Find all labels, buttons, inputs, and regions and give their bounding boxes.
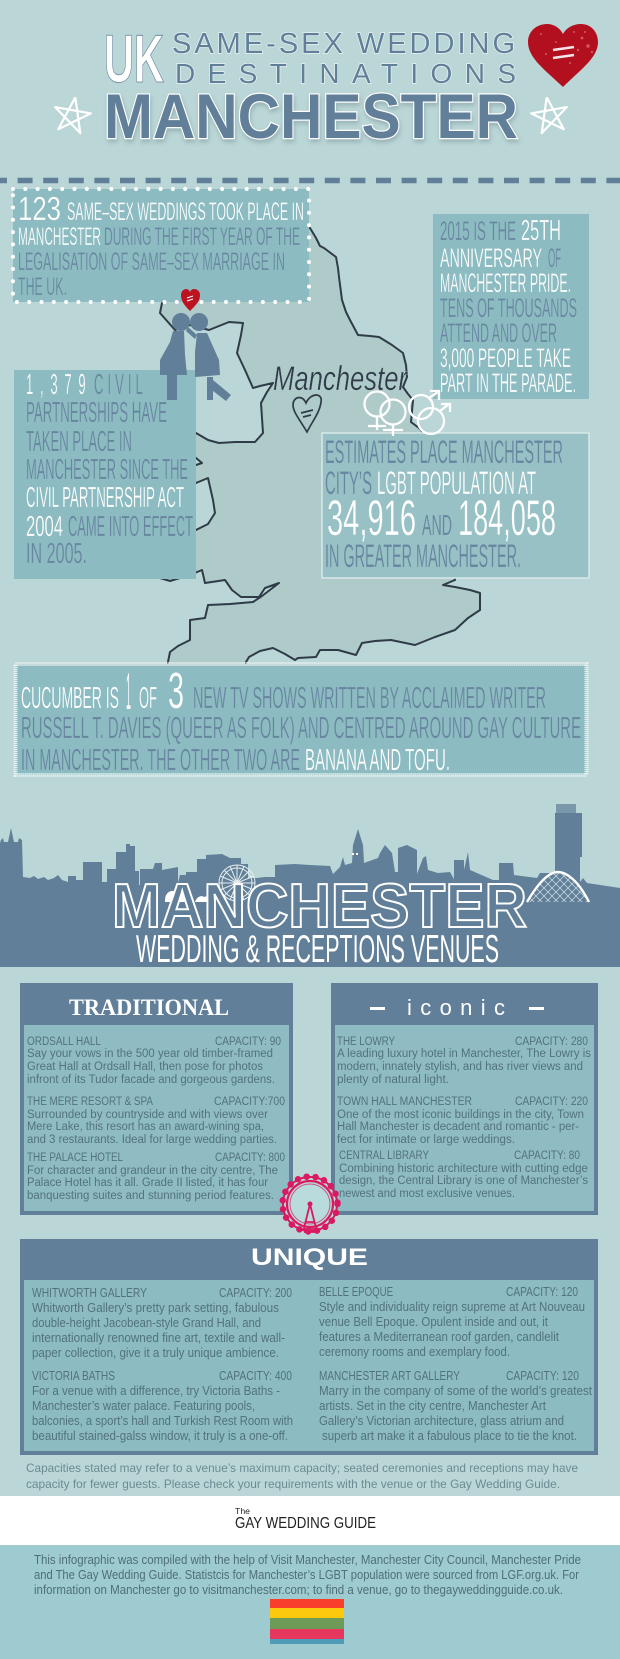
- venue: Town Hall Manchester: One of the most iconic buildings in the city, Town: [337, 1109, 584, 1121]
- venue: Victoria Baths: Manchester’s water palace. Featuring pools,: [32, 1399, 255, 1413]
- title: same-sex wedding: SAME-SEX WEDDING: [172, 28, 515, 60]
- venue: The Mere Resort: THE MERE RESORT & SPA: [27, 1096, 153, 1108]
- venue: Manchester Art Gallery: artists. Set in the city centre, Manchester Art: [319, 1399, 546, 1413]
- panel: LGBT population: CITY’S: [325, 465, 372, 501]
- panel: 123 weddings: MANCHESTER: [18, 223, 101, 251]
- venue: The Lowry: CAPACITY: 280: [515, 1036, 588, 1048]
- panel: civil partnerships: CIVIL: [94, 368, 147, 400]
- venue: The Palace Hotel: [27, 1152, 285, 1202]
- venue: Central Library: CENTRAL LIBRARY: [339, 1150, 429, 1162]
- panel: civil partnerships: IN 2005.: [26, 538, 87, 570]
- venue: Manchester Art Gallery: [319, 1369, 592, 1443]
- venue: Belle Epoque: Style and individuality reign supreme at Art Nouveau: [319, 1300, 585, 1314]
- icon: gender symbols: [364, 391, 450, 436]
- venue: The Palace Hotel: banquesting suites and stunning period features.: [27, 1190, 274, 1202]
- title: destinations: DESTINATIONS: [175, 58, 516, 89]
- venue: Town Hall Manchester: CAPACITY: 220: [515, 1096, 588, 1108]
- panel: 123 weddings: THE UK.: [18, 273, 67, 301]
- icon: Lowry dome: [527, 872, 589, 902]
- venue: The Palace Hotel: CAPACITY: 800: [215, 1152, 285, 1164]
- heading: Manchester outline: MANCHESTER: [112, 872, 527, 941]
- heading: iconic: iconic: [407, 995, 505, 1020]
- white clouds behind the heading: [165, 890, 213, 902]
- panel: Manchester Pride: 25TH: [521, 215, 561, 247]
- venue: Victoria Baths: For a venue with a difference, try Victoria Baths -: [32, 1384, 280, 1398]
- heading: unique: UNIQUE: [251, 1244, 368, 1271]
- panel: Cucumber TV show: BANANA AND TOFU.: [305, 742, 450, 777]
- venue: Central Library: design, the Central Library is one of Manchester’s: [339, 1175, 588, 1187]
- panel: Cucumber TV show: CUCUMBER IS: [21, 680, 119, 715]
- venue: Belle Epoque: features a Mediterranean roof garden, candlelit: [319, 1330, 559, 1344]
- title: Manchester: MANCHESTER: [104, 82, 518, 152]
- venue: Whitworth Gallery: internationally renowned fine art, textile and wall-: [32, 1331, 285, 1345]
- capacity disclaimer: capacity for fewer guests. Please check your requirements with the venue or the Gay Wedding Guide.: [26, 1477, 560, 1491]
- venue: The Lowry: A leading luxury hotel in Manchester, The Lowry is: [337, 1048, 591, 1060]
- venue: Manchester Art Gallery: CAPACITY: 120: [506, 1369, 579, 1383]
- venue: Central Library: [339, 1150, 588, 1200]
- panel: civil partnerships: TAKEN PLACE IN: [26, 426, 132, 458]
- icon: red heart: [528, 24, 598, 87]
- icon: pink wheel badge: [282, 1176, 338, 1232]
- icon: small heart: [181, 289, 200, 311]
- logo band: The Gay Wedding Guide: The: [235, 1507, 251, 1516]
- panel: Cucumber TV show: [16, 662, 586, 777]
- icon: kissing couple: [160, 313, 231, 401]
- panel: Cucumber TV show: IN MANCHESTER. THE OTHER TWO ARE: [21, 742, 300, 777]
- text: CAME INTO EFFECT: [68, 511, 193, 543]
- footer credits: This infographic was compiled with the help of Visit Manchester, Manchester City Council, Manchester Pride: [34, 1553, 581, 1567]
- skyline silhouette: [0, 813, 620, 967]
- venue: The Lowry: [337, 1036, 591, 1086]
- venue: The Palace Hotel: Palace Hotel has it all. Grade II listed, it has four: [27, 1177, 268, 1189]
- footer credits: information on Manchester go to visitmanchester.com; to find a venue, go to thegayweddingguide.co.uk.: [34, 1583, 563, 1597]
- panel: Cucumber TV show: 1: [126, 663, 131, 721]
- venue: The Mere Resort: Surrounded by countryside and with views over: [27, 1109, 268, 1121]
- panel: 123 weddings: 123: [18, 190, 61, 227]
- panel: LGBT population: 34,916: [327, 490, 416, 546]
- Beetham Tower crown: [556, 804, 576, 813]
- venue: Victoria Baths: beautiful stained-galss window, it truly is a one-off.: [32, 1429, 288, 1443]
- icon: left star: [55, 97, 91, 133]
- venue: Victoria Baths: CAPACITY: 400: [219, 1369, 292, 1383]
- venue: Whitworth Gallery: CAPACITY: 200: [219, 1286, 292, 1300]
- venue: Whitworth Gallery: WHITWORTH GALLERY: [32, 1286, 148, 1300]
- panel: Manchester Pride: OF: [548, 243, 561, 273]
- venue: The Lowry: THE LOWRY: [337, 1036, 395, 1048]
- footer panel: [0, 1545, 620, 1659]
- venue: Belle Epoque: [319, 1285, 585, 1359]
- venue: The Palace Hotel: THE PALACE HOTEL: [27, 1152, 124, 1164]
- venue: Ordsall Hall: CAPACITY: 90: [215, 1036, 281, 1048]
- panel: Cucumber TV show: 3: [168, 662, 184, 719]
- venue: The Lowry: plenty of natural light.: [337, 1074, 449, 1086]
- venue: The Palace Hotel: For character and grandeur in the city centre, The: [27, 1165, 278, 1177]
- venue: Victoria Baths: balconies, a sport’s hall and Turkish Rest Room with: [32, 1414, 293, 1428]
- capacity disclaimer: [26, 1461, 578, 1491]
- icon: rainbow flag: [270, 1599, 344, 1644]
- venue: The Lowry: modern, innately stylish, and has river views and: [337, 1061, 583, 1073]
- panel: 123 weddings: SAME–SEX WEDDINGS TOOK PLACE IN: [67, 198, 304, 226]
- panel: 123 weddings: [13, 189, 309, 302]
- panel: 123 weddings: LEGALISATION OF SAME–SEX MARRIAGE IN: [18, 248, 285, 276]
- venue: Belle Epoque: ceremony rooms and exemplary food.: [319, 1345, 510, 1359]
- venue: Manchester Art Gallery: Gallery’s Victorian architecture, glass atrium and: [319, 1414, 564, 1428]
- venue: Ordsall Hall: infront of its Tudor facade and gorgeous gardens.: [27, 1074, 275, 1086]
- venue: Whitworth Gallery: paper collection, give it a truly unique ambience.: [32, 1346, 279, 1360]
- label: Manchester handwriting: Manchester: [273, 360, 408, 398]
- venue: Victoria Baths: VICTORIA BATHS: [32, 1369, 115, 1383]
- venue: The Mere Resort: [27, 1096, 285, 1146]
- venue: Whitworth Gallery: Whitworth Gallery’s pretty park setting, fabulous: [32, 1301, 279, 1315]
- icon: right star: [531, 97, 567, 133]
- venue: Town Hall Manchester: fect for intimate or large weddings.: [337, 1134, 515, 1146]
- title: UK: UK: [104, 21, 164, 97]
- venue: Town Hall Manchester: Hall Manchester is decadent and romantic - per-: [337, 1121, 579, 1133]
- venue: Ordsall Hall: [27, 1036, 281, 1086]
- icon: ferris wheel: [219, 865, 255, 901]
- logo band: The Gay Wedding Guide: [0, 1496, 620, 1545]
- venue: Manchester Art Gallery: MANCHESTER ART GALLERY: [319, 1369, 461, 1383]
- panel: iconic venues: [331, 983, 598, 1215]
- panel: civil partnerships: [14, 368, 196, 579]
- venue: Belle Epoque: venue Bell Epoque. Opulent inside and out, it: [319, 1315, 548, 1329]
- venue: Town Hall Manchester: TOWN HALL MANCHESTER: [337, 1096, 472, 1108]
- venue: Manchester Art Gallery: Marry in the company of some of the world’s greatest: [319, 1384, 592, 1398]
- panel: LGBT population: [322, 433, 589, 578]
- venue: The Mere Resort: Mere Lake, this resort has an award-wining spa,: [27, 1121, 264, 1133]
- heading: traditional: TRADITIONAL: [69, 995, 229, 1020]
- venue: Ordsall Hall: Say your vows in the 500 year old timber-framed: [27, 1048, 273, 1060]
- venue: Manchester Art Gallery: superb art make it a fabulous place to tie the knot.: [322, 1429, 577, 1443]
- venue: Victoria Baths: [32, 1369, 293, 1443]
- venue: Belle Epoque: CAPACITY: 120: [506, 1285, 578, 1299]
- capacity disclaimer: Capacities stated may refer to a venue’s maximum capacity; seated ceremonies and receptions may have: [26, 1461, 578, 1475]
- town hall clock lights: [352, 853, 358, 855]
- icon: hand-drawn heart: [293, 395, 321, 432]
- panel: 123 weddings: DURING THE FIRST YEAR OF THE: [104, 223, 300, 251]
- venue: Whitworth Gallery: [32, 1286, 292, 1360]
- panel: civil partnerships: PARTNERSHIPS HAVE: [26, 397, 167, 429]
- footer credits: [34, 1553, 581, 1597]
- panel: traditional venues: [20, 983, 293, 1215]
- text: CIVIL PARTNERSHIP ACT: [26, 482, 184, 514]
- venue: The Mere Resort: CAPACITY:700: [214, 1096, 285, 1108]
- venue: Ordsall Hall: Great Hall at Ordsall Hall, then pose for photos: [27, 1061, 263, 1073]
- panel: LGBT population: AND: [422, 510, 452, 542]
- panel: unique venues: [20, 1239, 598, 1455]
- panel: Cucumber TV show: OF: [139, 680, 157, 715]
- text: MANCHESTER SINCE THE: [26, 454, 188, 486]
- skyline banner: [0, 804, 620, 971]
- venue: Central Library: newest and most exclusive venues.: [339, 1188, 515, 1200]
- map of England and Wales: [150, 210, 480, 690]
- title: [104, 21, 518, 152]
- panel: civil partnerships: 1,379: [26, 368, 92, 400]
- panel: Manchester Pride: 2015 IS THE: [440, 216, 516, 246]
- venue: Whitworth Gallery: double-height Jacobean-style Grand Hall, and: [32, 1316, 261, 1330]
- venue: Town Hall Manchester: [337, 1096, 588, 1146]
- venue: Belle Epoque: BELLE EPOQUE: [319, 1285, 393, 1299]
- venue: Ordsall Hall: ORDSALL HALL: [27, 1036, 102, 1048]
- venue: Central Library: Combining historic architecture with cutting edge: [339, 1163, 588, 1175]
- panel: civil partnerships: 2004: [26, 511, 63, 543]
- venue: Central Library: CAPACITY: 80: [514, 1150, 580, 1162]
- venue: The Mere Resort: and 3 restaurants. Ideal for large wedding parties.: [27, 1134, 277, 1146]
- logo band: The Gay Wedding Guide: GAY WEDDING GUIDE: [235, 1515, 376, 1532]
- panel: Manchester Pride: [433, 214, 589, 399]
- heading: iconic: [370, 995, 544, 1020]
